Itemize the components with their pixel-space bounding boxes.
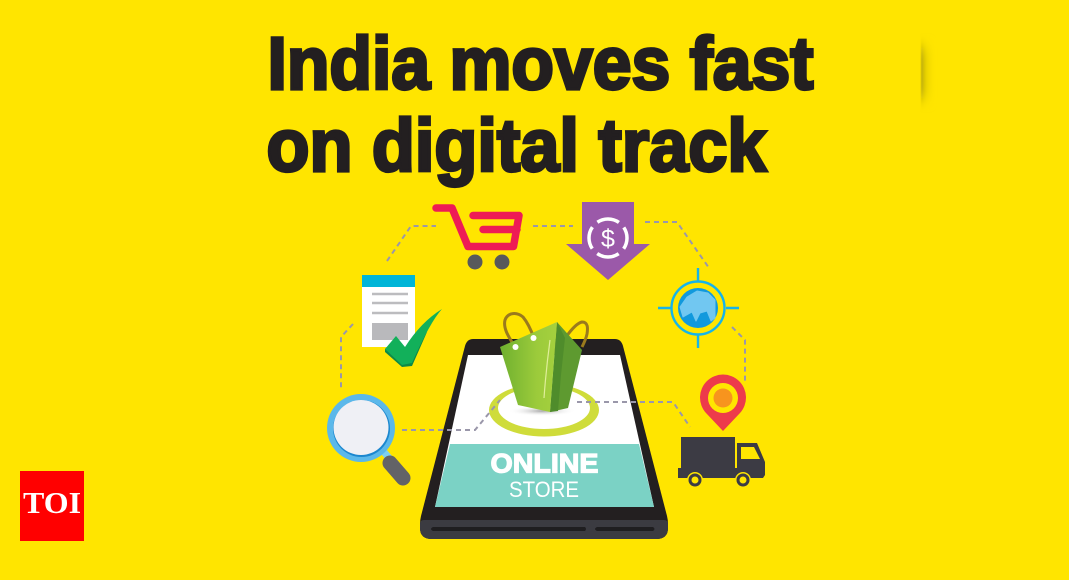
icon: green shopping bag xyxy=(500,314,587,412)
screen label: ONLINE xyxy=(490,448,598,478)
dashed lines on screen xyxy=(402,400,690,430)
icon: location pin xyxy=(700,375,746,431)
title xyxy=(266,22,814,187)
icon: document with check mark xyxy=(362,275,442,367)
phone base strip xyxy=(420,520,668,539)
icon: magnifying glass xyxy=(327,394,403,478)
screen label xyxy=(490,448,598,502)
dashed connector lines xyxy=(341,222,745,391)
icon: delivery truck xyxy=(678,437,765,488)
title: India moves fast xyxy=(268,22,814,105)
phone body xyxy=(420,339,668,539)
icon: shopping cart xyxy=(436,208,519,270)
screen label: STORE xyxy=(509,477,579,502)
ring xyxy=(489,384,599,437)
title: on digital track xyxy=(266,104,767,187)
icon: price down arrow: $ xyxy=(601,225,615,253)
icon: globe with crosshair xyxy=(658,268,739,348)
phone: online store xyxy=(402,339,690,539)
icon: price down arrow xyxy=(566,202,650,280)
logo: TOI xyxy=(20,471,84,541)
logo: TOI: TOI xyxy=(23,485,81,520)
phone screen xyxy=(435,355,654,507)
